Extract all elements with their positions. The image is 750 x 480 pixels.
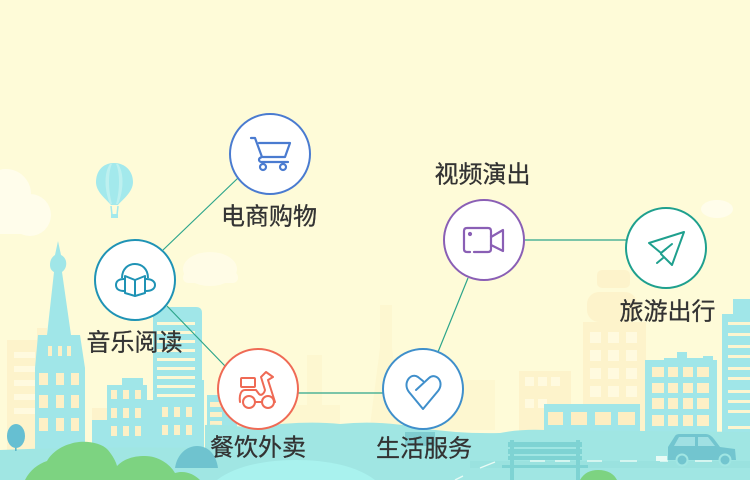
tree bbox=[7, 424, 25, 451]
label: food delivery: 餐饮外卖 bbox=[210, 434, 306, 462]
icon: scooter bbox=[240, 372, 275, 408]
car bbox=[656, 434, 736, 466]
node: travel bbox=[626, 208, 706, 288]
node: video and shows bbox=[444, 200, 524, 280]
teal building: tall striped bbox=[147, 307, 204, 450]
node: food delivery bbox=[218, 349, 298, 429]
label: music and reading: 音乐阅读 bbox=[86, 330, 182, 356]
fountain block bbox=[405, 432, 435, 446]
connector lines bbox=[163, 178, 626, 393]
icon: headphones and book bbox=[116, 264, 155, 296]
cloud: right bbox=[701, 200, 733, 218]
icon: video camera bbox=[464, 228, 503, 252]
hot air balloon bbox=[96, 163, 133, 218]
icon: heart bbox=[406, 376, 441, 409]
faint background buildings bbox=[7, 270, 646, 450]
teal building: low right bbox=[544, 404, 640, 436]
bench bbox=[502, 440, 588, 480]
node: music and reading bbox=[95, 240, 175, 320]
label: shopping: 电商购物 bbox=[221, 204, 317, 230]
bushes: left bbox=[25, 442, 200, 480]
bush: right bbox=[580, 470, 617, 480]
node: shopping bbox=[230, 114, 310, 194]
label: video and shows: 视频演出 bbox=[434, 162, 530, 188]
road dashes bbox=[455, 461, 712, 480]
icon: cart bbox=[251, 138, 290, 170]
very faint middle buildings bbox=[250, 305, 495, 433]
cloud: middle bbox=[183, 252, 238, 286]
teal building: beside food circle bbox=[207, 395, 237, 450]
ground bbox=[0, 423, 750, 480]
node: life services bbox=[383, 349, 463, 429]
label: life services: 生活服务 bbox=[376, 436, 472, 462]
road band bbox=[470, 461, 750, 468]
label: travel: 旅游出行 bbox=[620, 298, 716, 326]
teal building: grid right bbox=[645, 352, 717, 436]
teal building: far right bbox=[722, 299, 750, 436]
pond bbox=[217, 460, 375, 480]
dome bbox=[175, 446, 218, 468]
cloud: left bbox=[0, 169, 51, 236]
teal tower bbox=[35, 241, 85, 450]
icon: paper plane bbox=[649, 232, 684, 265]
teal building: mid left bbox=[92, 378, 147, 450]
faint building windows bbox=[14, 332, 637, 414]
